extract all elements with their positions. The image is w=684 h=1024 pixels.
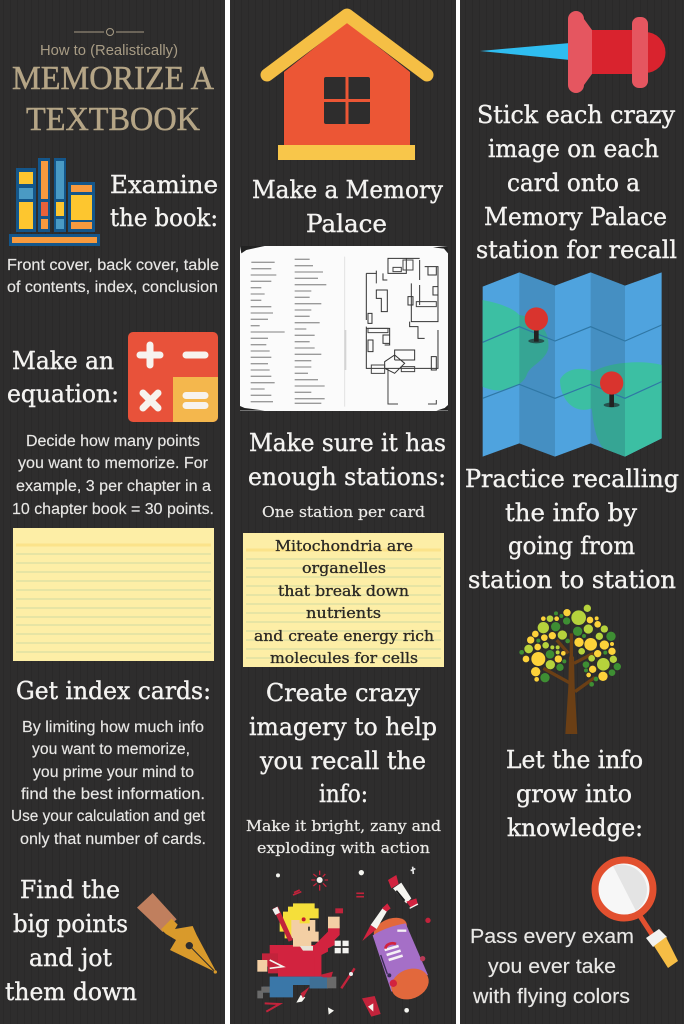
text: index card details (11, 719, 206, 848)
heading: find the big points (5, 876, 137, 1006)
heading: stick each crazy image: image on each (488, 135, 659, 163)
heading: make sure it has enough stations: enough stations: (248, 463, 446, 491)
heading: find the big points: them down (5, 978, 137, 1006)
title block: TEXTBOOK (26, 101, 200, 138)
heading: let the info grow (506, 746, 643, 842)
icon: house (267, 15, 427, 160)
text: index card details: find the best information. (21, 786, 205, 803)
heading: create crazy imagery: info: (319, 780, 368, 808)
icon: folded map with pins (483, 272, 662, 457)
text: examine details: Front cover, back cover, table (7, 257, 219, 274)
heading: make a memory palace (252, 176, 443, 238)
text: pass every exam: with flying colors (472, 986, 630, 1008)
heading: create crazy imagery: you recall the (259, 747, 426, 775)
text: pass every exam: you ever take (488, 956, 616, 978)
heading: find the big points: big points (13, 910, 128, 938)
heading: practice recalling (465, 465, 679, 594)
text: equation details: example, 3 per chapter in a (16, 478, 211, 495)
heading: stick each crazy image: Memory Palace (484, 203, 667, 231)
icon: knowledge tree (519, 605, 621, 734)
text: one station per card: One station per card (262, 505, 425, 521)
title block: MEMORIZE A (12, 60, 214, 97)
example index card: organelles (302, 561, 386, 577)
heading: create crazy imagery: Create crazy (266, 679, 420, 707)
text: equation details: Decide how many points (26, 433, 200, 450)
heading: find the big points: Find the (20, 876, 120, 904)
heading: stick each crazy image (476, 101, 677, 264)
icon: blank index card (13, 528, 214, 661)
heading: stick each crazy image: card onto a (507, 169, 640, 197)
text: index card details: you want to memorize, (32, 741, 190, 758)
heading: find the big points: and jot (29, 944, 112, 972)
text: make it bright: exploding with action (257, 841, 430, 857)
text: examine details (7, 257, 219, 296)
heading: make sure it has enough stations: Make sure it has (249, 429, 446, 457)
icon: magnifying glass (595, 860, 678, 968)
text: make it bright (246, 819, 441, 857)
text: index card details: By limiting how much info (22, 719, 204, 736)
heading: create crazy imagery (249, 679, 437, 808)
heading: stick each crazy image: Stick each crazy (477, 101, 675, 129)
text: index card details: only that number of cards. (20, 831, 206, 848)
text: examine details: of contents, index, conclusion (7, 279, 218, 296)
heading: examine the book: Examine (110, 171, 218, 199)
text: equation details: 10 chapter book = 30 points. (12, 501, 214, 518)
heading: make an equation (7, 347, 119, 408)
title block (12, 28, 214, 138)
heading: practice recalling: going from (508, 532, 635, 560)
pixel boy (257, 903, 343, 998)
panel: column 3 (460, 0, 684, 1024)
icon: calculator (128, 332, 218, 422)
example index card: Mitochondria are (275, 539, 413, 555)
heading: make an equation: equation: (7, 380, 119, 408)
text: pass every exam: Pass every exam (470, 926, 634, 948)
example index card: and create energy rich (254, 629, 434, 645)
heading: make a memory palace: Make a Memory (252, 176, 443, 204)
icon: fountain pen nib (137, 893, 217, 974)
heading: examine the book: the book: (110, 204, 218, 232)
heading: get index cards: Get index cards: (16, 677, 211, 705)
flying debris (265, 867, 431, 1017)
heading: make a memory palace: Palace (306, 210, 387, 238)
text: make it bright: Make it bright, zany and (246, 819, 441, 835)
text: equation details (12, 433, 214, 518)
heading: examine the book (110, 171, 218, 232)
exploding capsule (370, 913, 433, 1005)
heading: create crazy imagery: imagery to help (249, 713, 437, 741)
panel: column 1 (0, 0, 225, 1024)
example index card: nutrients (306, 606, 381, 622)
example index card (243, 533, 444, 667)
heading: practice recalling: Practice recalling (465, 465, 679, 493)
example index card: molecules for cells (270, 651, 418, 667)
text: pass every exam (470, 926, 634, 1008)
heading: make an equation: Make an (12, 347, 114, 375)
text: equation details: you want to memorize. For (18, 455, 208, 472)
example index card: that break down (278, 584, 409, 600)
heading: make sure it has enough stations (248, 429, 446, 491)
text: index card details: you prime your mind to (33, 764, 194, 781)
heading: let the info grow: grow into (516, 780, 632, 808)
heading: let the info grow: knowledge: (507, 814, 643, 842)
heading: stick each crazy image: station for recall (476, 236, 677, 264)
heading: let the info grow: Let the info (506, 746, 643, 774)
panel: column 2 (230, 0, 456, 1024)
text: index card details: Use your calculation and get (11, 808, 206, 825)
icon: push pin (480, 11, 666, 93)
heading: practice recalling: the info by (505, 499, 637, 527)
heading: practice recalling: station to station (468, 566, 676, 594)
icon: books on shelf (9, 158, 100, 246)
image: hand-drawn memory palace floor plan and station list (240, 246, 448, 411)
title block: How to (Realistically) (40, 42, 178, 59)
illustration: pixel art boy with exploding capsule (257, 867, 433, 1017)
